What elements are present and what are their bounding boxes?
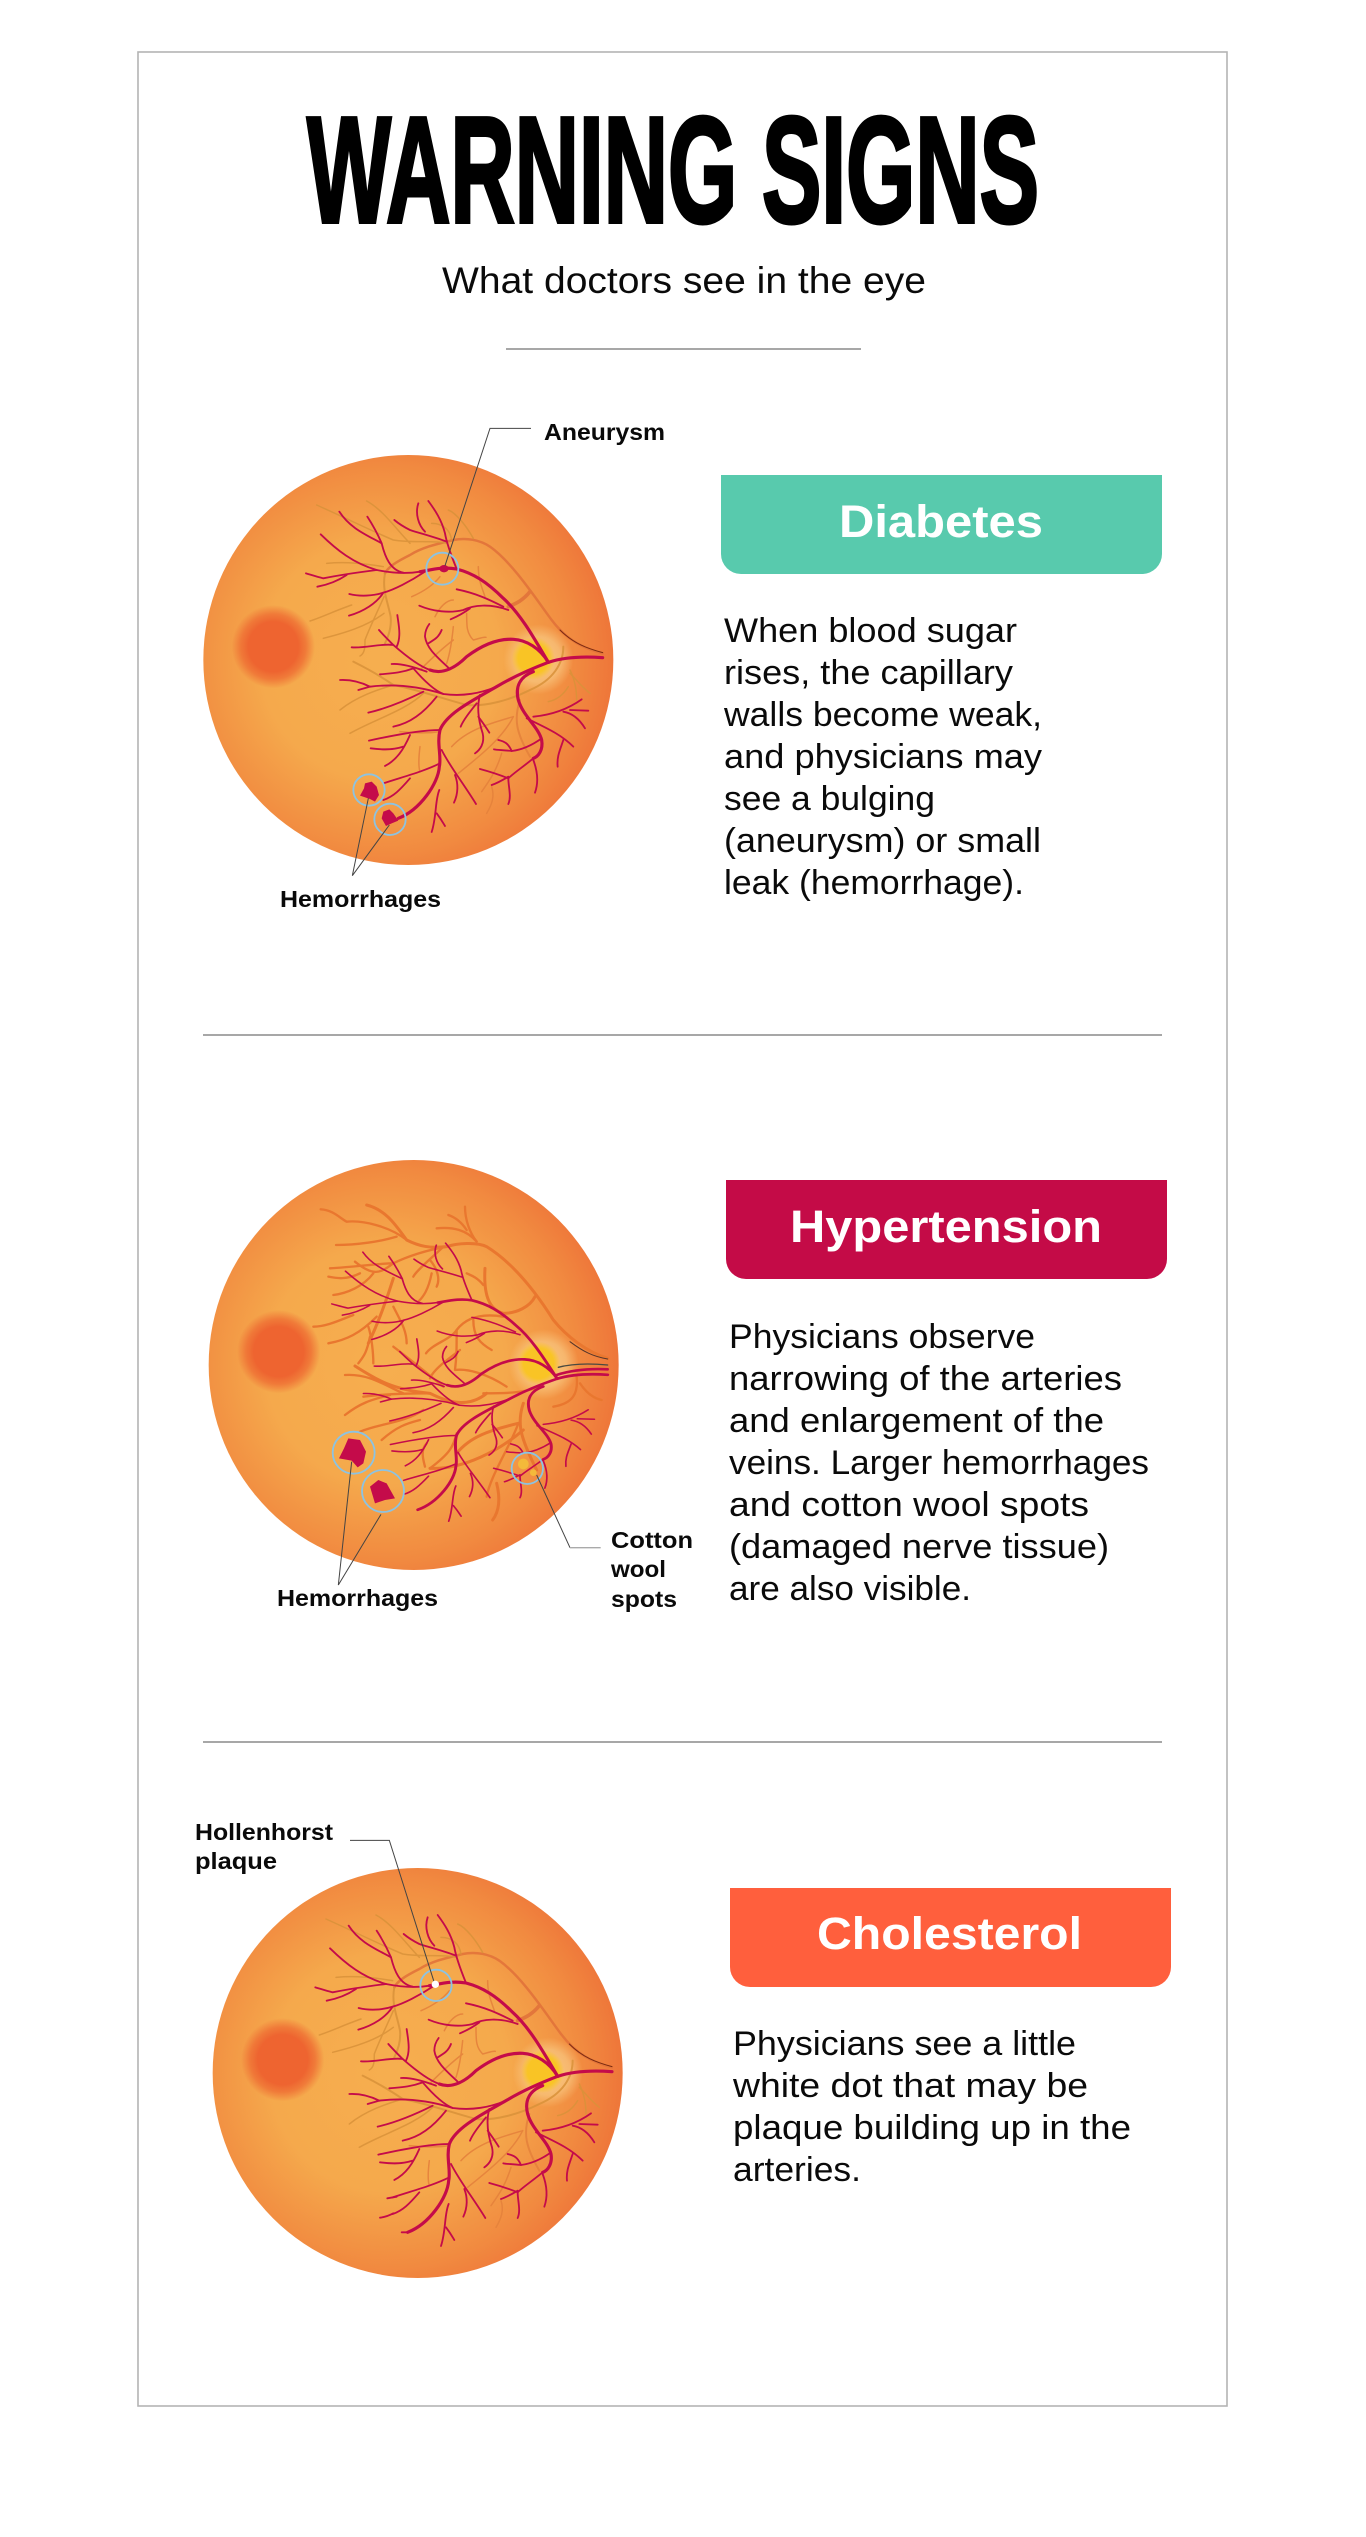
text: diabetes description: (aneurysm) or small: [724, 822, 1041, 860]
label: cotton wool spots: spots: [611, 1586, 677, 1612]
text: cholesterol description: [732, 2025, 1131, 2189]
text: diabetes description: and physicians may: [724, 738, 1042, 776]
label: aneurysm: Aneurysm: [544, 419, 665, 445]
text: hypertension description: (damaged nerve tissue): [729, 1528, 1109, 1566]
text: hypertension description: [729, 1318, 1149, 1608]
text: hypertension description: veins. Larger hemorrhages: [729, 1444, 1149, 1482]
eye illustration: cholesterol: [213, 1840, 623, 2278]
eye illustration: hypertension: [209, 1160, 619, 1585]
label: hollenhorst plaque: Hollenhorst: [195, 1819, 333, 1845]
banner: diabetes: Diabetes: [839, 496, 1043, 547]
text: hypertension description: and cotton wool spots: [729, 1486, 1089, 1524]
text: diabetes description: When blood sugar: [724, 612, 1017, 650]
label: cotton wool spots: wool: [610, 1556, 666, 1582]
label: cotton wool spots: [610, 1527, 693, 1612]
text: diabetes description: walls become weak,: [723, 696, 1042, 734]
label: hollenhorst plaque: [195, 1819, 333, 1874]
label: hollenhorst plaque: plaque: [195, 1848, 277, 1874]
banner: hypertension: [726, 1180, 1167, 1279]
text: cholesterol description: arteries.: [733, 2151, 861, 2189]
banner: cholesterol: [730, 1888, 1171, 1987]
banner: hypertension: Hypertension: [790, 1201, 1102, 1252]
text: cholesterol description: white dot that may be: [732, 2067, 1088, 2105]
banner: cholesterol: Cholesterol: [817, 1908, 1082, 1959]
label: hemorrhages: Hemorrhages: [277, 1585, 438, 1611]
banner: diabetes: [721, 475, 1162, 574]
subtitle: What doctors see in the eye: [442, 260, 926, 301]
panel: hypertension: [209, 1160, 1167, 1612]
background veins: hypertension: [313, 1205, 608, 1520]
label: hemorrhages: Hemorrhages: [280, 886, 441, 912]
text: hypertension description: and enlargement of the: [729, 1402, 1104, 1440]
outer frame: [138, 52, 1227, 2406]
text: diabetes description: see a bulging: [724, 780, 935, 818]
label: cotton wool spots: Cotton: [611, 1527, 693, 1553]
panel: cholesterol: [195, 1819, 1171, 2278]
text: hypertension description: Physicians observe: [729, 1318, 1035, 1356]
text: diabetes description: leak (hemorrhage).: [724, 864, 1024, 902]
text: diabetes description: rises, the capillary: [724, 654, 1013, 692]
text: cholesterol description: Physicians see a little: [733, 2025, 1076, 2063]
text: hypertension description: narrowing of the arteries: [729, 1360, 1122, 1398]
panel: diabetes: [203, 419, 1162, 912]
text: diabetes description: [723, 612, 1042, 902]
text: hypertension description: are also visible.: [729, 1570, 971, 1608]
text: cholesterol description: plaque building up in the: [733, 2109, 1131, 2147]
eye illustration: diabetes: [203, 428, 613, 876]
